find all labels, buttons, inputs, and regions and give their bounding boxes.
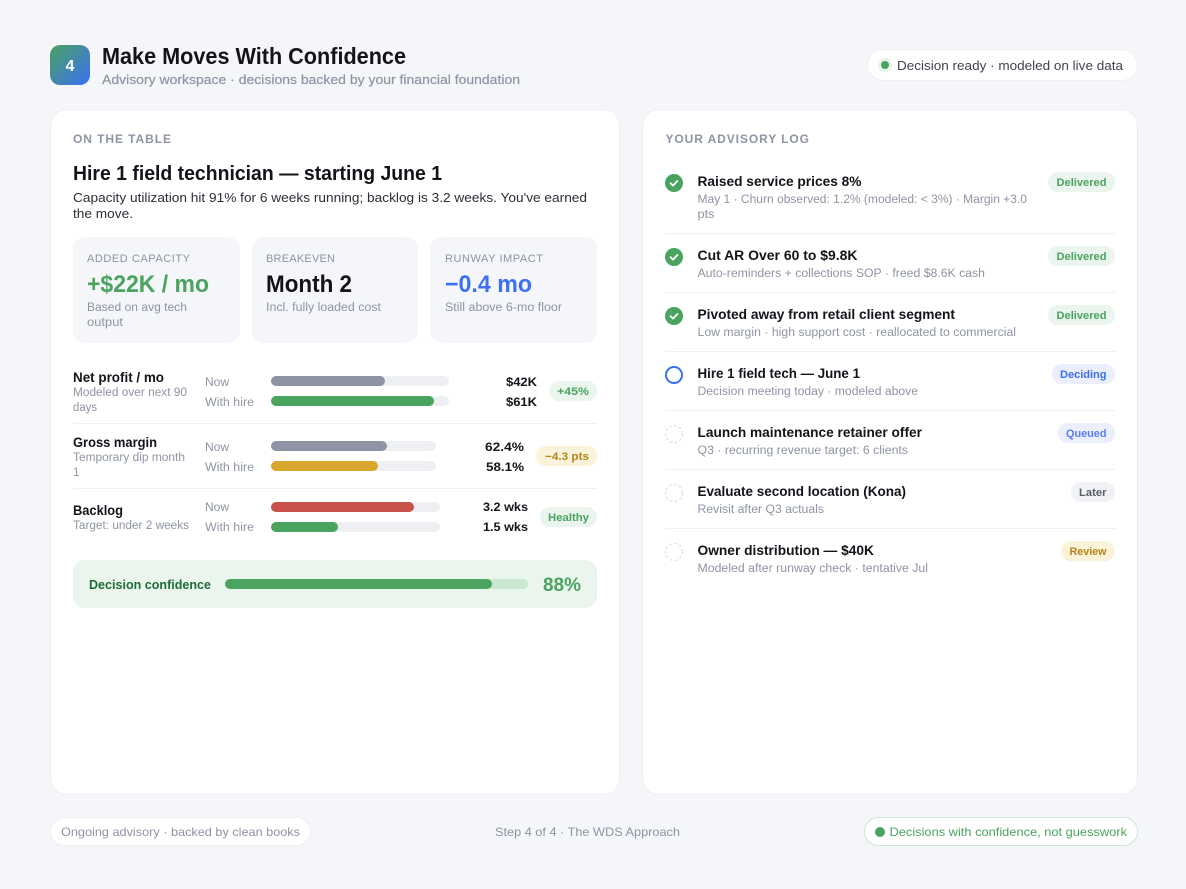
stat card: runway impact: [430, 237, 597, 343]
comparison row: gross margin: 1: [73, 467, 79, 479]
decision confidence meter: 88%: [543, 575, 581, 596]
comparison row: gross margin: 58.1%: [486, 460, 524, 474]
comparison row: gross margin: Temporary dip month: [73, 452, 185, 464]
comparison row: gross margin: −4.3 pts: [545, 451, 589, 463]
comparison row: backlog: With hire: [205, 522, 254, 534]
log item: maintenance retainer: Q3 · recurring revenue target: 6 clients: [698, 445, 908, 457]
panel heading: ON THE TABLE: [73, 132, 171, 146]
log item: maintenance retainer: [666, 423, 1115, 457]
proposal heading: Hire 1 field technician — starting June 1: [73, 162, 442, 185]
panel: advisory log: [642, 110, 1138, 794]
log item: cut AR: Cut AR Over 60 to $9.8K: [698, 248, 858, 263]
panel: on the table: [50, 110, 620, 794]
stat card: added capacity: +$22K / mo: [87, 271, 209, 298]
stat card: added capacity: [73, 237, 240, 343]
stat card: runway impact: Still above 6-mo floor: [445, 302, 562, 314]
status pill: Decision ready · modeled on live data: [897, 58, 1124, 73]
log item: cut AR: Auto-reminders + collections SOP · freed $8.6K cash: [698, 268, 985, 280]
log item: raised prices: Raised service prices 8%: [698, 174, 862, 189]
comparison row: net profit: Modeled over next 90: [73, 387, 187, 399]
comparison row: gross margin: [73, 435, 597, 479]
log item: owner distribution: [666, 541, 1115, 575]
comparison row: net profit: With hire: [205, 397, 254, 409]
proposal description: Capacity utilization hit 91% for 6 weeks running; backlog is 3.2 weeks. You've earned: [73, 190, 587, 205]
stat card: added capacity: output: [87, 317, 124, 329]
status pill: [868, 50, 1138, 80]
log item: pivoted segment: [665, 305, 1115, 339]
comparison row: backlog: 1.5 wks: [483, 520, 528, 534]
log item: raised prices: Delivered: [1056, 177, 1106, 189]
footer left pill: [50, 818, 310, 846]
log item: cut AR: [665, 246, 1115, 280]
footer left pill: Ongoing advisory · backed by clean books: [61, 825, 300, 839]
comparison row: backlog: Backlog: [73, 503, 123, 518]
comparison row: net profit: Now: [205, 377, 230, 389]
log item: raised prices: [665, 172, 1115, 221]
step badge: 4: [66, 58, 75, 75]
log item: hire field tech: [666, 364, 1115, 398]
comparison row: gross margin: With hire: [205, 462, 254, 474]
decision confidence meter: [73, 560, 597, 608]
log item: raised prices: pts: [698, 209, 715, 221]
comparison row: gross margin: 62.4%: [485, 440, 524, 454]
panel heading: YOUR ADVISORY LOG: [666, 132, 809, 146]
stat card: added capacity: Based on avg tech: [87, 302, 187, 314]
comparison row: backlog: 3.2 wks: [483, 500, 528, 514]
comparison row: backlog: Target: under 2 weeks: [73, 520, 189, 532]
footer: [50, 818, 1138, 846]
comparison row: gross margin: Now: [205, 442, 230, 454]
log item: owner distribution: Modeled after runway check · tentative Jul: [698, 563, 928, 575]
stat card: breakeven: BREAKEVEN: [266, 253, 335, 265]
log item: owner distribution: Review: [1070, 546, 1107, 558]
stat card: breakeven: [252, 237, 418, 343]
log item: second location: Evaluate second location (Kona): [698, 484, 906, 499]
log item: hire field tech: Decision meeting today · modeled above: [698, 386, 918, 398]
comparison row: net profit: $61K: [506, 395, 537, 409]
footer step text: Step 4 of 4 · The WDS Approach: [495, 825, 680, 839]
footer right pill: Decisions with confidence, not guesswork: [890, 825, 1128, 839]
footer right pill: [864, 818, 1138, 846]
subtitle: Advisory workspace · decisions backed by your financial foundation: [102, 72, 520, 87]
comparison row: backlog: [73, 500, 597, 534]
log item: owner distribution: Owner distribution — $40K: [698, 543, 874, 558]
comparison row: gross margin: Gross margin: [73, 435, 157, 450]
log item: pivoted segment: Low margin · high support cost · reallocated to commercial: [698, 327, 1016, 339]
log item: second location: Revisit after Q3 actuals: [698, 504, 824, 516]
comparison row: net profit: Net profit / mo: [73, 370, 164, 385]
title: Make Moves With Confidence: [102, 43, 406, 69]
step badge: [50, 45, 90, 85]
stat card: breakeven: Incl. fully loaded cost: [266, 302, 382, 314]
comparison row: net profit: +45%: [557, 386, 589, 398]
stat card: runway impact: RUNWAY IMPACT: [445, 253, 543, 265]
stat card: added capacity: ADDED CAPACITY: [87, 253, 191, 265]
stat card: runway impact: −0.4 mo: [445, 271, 532, 298]
log item: raised prices: May 1 · Churn observed: 1.2% (modeled: < 3%) · Margin +3.0: [698, 194, 1027, 206]
log item: hire field tech: Deciding: [1060, 369, 1106, 381]
log item: maintenance retainer: Launch maintenance retainer offer: [698, 425, 923, 440]
stat card: breakeven: Month 2: [266, 271, 352, 298]
comparison row: backlog: Now: [205, 502, 230, 514]
header: [50, 43, 1138, 87]
comparison row: net profit: days: [73, 402, 97, 414]
comparison row: net profit: $42K: [506, 375, 537, 389]
log item: pivoted segment: Pivoted away from retail client segment: [698, 307, 955, 322]
log item: second location: Later: [1079, 487, 1107, 499]
decision confidence meter: Decision confidence: [89, 578, 211, 592]
log item: cut AR: Delivered: [1056, 251, 1106, 263]
log item: hire field tech: Hire 1 field tech — June 1: [698, 366, 860, 381]
log item: pivoted segment: Delivered: [1056, 310, 1106, 322]
proposal description: [73, 190, 587, 221]
log item: maintenance retainer: Queued: [1066, 428, 1106, 440]
log item: second location: [666, 482, 1115, 516]
comparison row: backlog: Healthy: [548, 512, 590, 524]
proposal description: the move.: [73, 206, 133, 221]
comparison row: net profit: [73, 370, 597, 414]
